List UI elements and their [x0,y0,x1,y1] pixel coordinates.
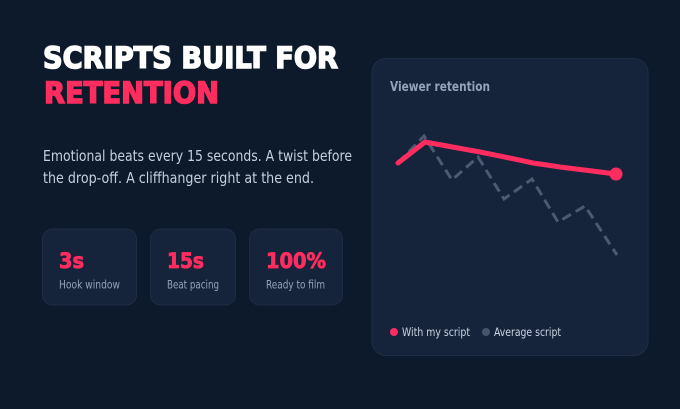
title: SCRIPTS BUILT FOR [43,41,338,75]
stat card: ready to film [250,229,342,305]
panel: viewer retention [372,58,648,356]
stat card: hook window: 3s [59,249,84,273]
line: average script [398,136,617,255]
stat card: beat pacing: 15s [167,249,204,273]
legend: with my script: With my script [402,325,470,339]
description text: the drop-off. A cliffhanger right at the end. [43,169,314,187]
stat card: hook window [42,229,136,305]
legend: average script: Average script [494,325,561,339]
stat card: beat pacing: Beat pacing [167,278,219,292]
line: with my script [398,142,622,180]
description text: Emotional beats every 15 seconds. A twist before [43,147,352,165]
stat card: ready to film: Ready to film [266,278,325,292]
title: RETENTION [44,76,219,110]
stat card: beat pacing [150,229,236,305]
description text [43,147,352,187]
chart heading: Viewer retention [390,80,490,95]
stat card: ready to film: 100% [266,249,326,273]
stat card: hook window: Hook window [59,278,120,292]
title [43,41,338,110]
